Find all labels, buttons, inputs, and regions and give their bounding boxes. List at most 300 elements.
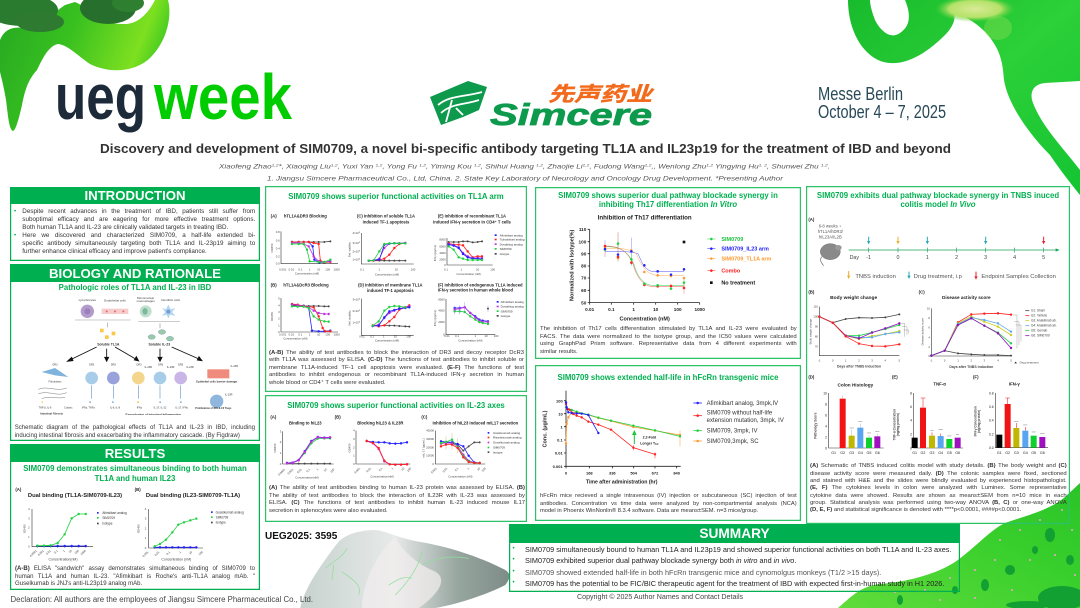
chart D: colon histology: ****: [850, 427, 854, 431]
chart A: hTL1A and DR3 blocking: 100: [325, 268, 330, 272]
chart A: dual binding TL1A-SIM0709-IL23: 2: [28, 525, 30, 529]
chart B: dual binding IL23-SIM0709-TL1A: 1: [145, 536, 147, 540]
panel: dual pathway blockade in vitro: [535, 187, 801, 359]
chart F: endogenous TL1A whole blood: 8000: [438, 298, 445, 302]
caption: Th17: [540, 326, 797, 354]
chart C: disease activity score: Days after TNBS induction: [950, 365, 994, 369]
arrow: 2.2-fold longer half-life: [632, 430, 659, 446]
chart A: hTL1A and DR3 blocking: (A): [271, 214, 277, 219]
chart C: disease activity score: 2: [929, 345, 931, 349]
chart E: recombinant TL1A IFN-gamma: 0.1: [444, 268, 448, 272]
chart B: dual binding IL23-SIM0709-TL1A: Isotype: [216, 520, 226, 524]
caption: IL-23 axes: The ability of test antibodies to block the interaction of IL23R with IL-23 was assessed by: [269, 493, 525, 499]
chart B: blocking hIL23 and IL23R: OD450: [347, 443, 351, 453]
chart B: blocking hIL23 and IL23R: 2: [353, 446, 355, 450]
panel: functional activities on TL1A arm: [265, 186, 527, 392]
chart A: dual binding TL1A-SIM0709-IL23: 1: [62, 548, 66, 552]
chart A: binding to hIL23: OD450: [273, 443, 277, 453]
charts: dual binding: [16, 487, 244, 562]
chart A: study timeline: Drug treatment, i.p: [914, 274, 962, 280]
chart F: IFN-gamma: (ng/mg protein): [977, 410, 981, 433]
chart: PK half-life: Time after administration (hr): [586, 479, 658, 485]
chart F: IFN-gamma: 0.8: [989, 392, 994, 396]
chart C: inhibition of mIL17 secretion: 20000: [426, 446, 434, 450]
chart F: IFN-gamma: [973, 375, 1048, 455]
chart A: binding to hIL23: 0: [280, 462, 282, 466]
chart A: dual binding TL1A-SIM0709-IL23: OD450: [23, 523, 27, 533]
chart B: body weight change: 90: [815, 325, 819, 329]
text: introduction bullets: specific antibody simultaneously targeting both TL1A and IL-23p19 aiming to: [22, 240, 255, 247]
chart A: hTL1A and DR3 blocking: 0.0: [276, 262, 280, 266]
chart F: IFN-gamma: 0.0: [989, 446, 994, 450]
chart F: endogenous TL1A whole blood: (F) Inhibition of endogenous TL1A induced: [438, 283, 523, 288]
declaration: Declaration: All authors are the employees of Jiangsu Simcere Pharmaceutical Co., Ltd.: [10, 594, 313, 604]
chart E: TNF-alpha: (E): [892, 375, 899, 380]
subtitle: pathologic roles: Pathologic roles of TL1A and IL-23 in IBD: [59, 283, 211, 292]
caption: TNBS model: (D, E, F) and statistical significance is denoted with ****p<0.0001, ####p<0.0001.: [810, 507, 1021, 513]
chart A: binding to hIL23: Concentration(nM): [295, 476, 319, 480]
chart A: study timeline: (A): [809, 217, 815, 222]
chart B: dual binding IL23-SIM0709-TL1A: 100: [198, 550, 204, 556]
chart A: study timeline: Day: [850, 255, 860, 261]
chart C: disease activity score: 10: [927, 306, 931, 310]
chart D: membrane TL1A apoptosis: Rel. viability: [347, 310, 351, 326]
chart C: disease activity score: 2: [971, 359, 973, 363]
diagram: TL1A and IL-23 pathway: IL-17, IFNγ: [176, 406, 189, 409]
diagram: TL1A and IL-23 pathway: Mononuclear: [137, 296, 154, 300]
chart E: TNF-alpha: G2: [921, 451, 926, 455]
panel: TNBS colitis model in vivo: [806, 186, 1070, 524]
authors: , Shihui Huang: [481, 164, 536, 170]
diagram: TL1A and IL-23 pathway: IL-23R: [167, 366, 175, 369]
chart A: dual binding TL1A-SIM0709-IL23: (A): [16, 487, 22, 492]
authors: 1, 2: [759, 162, 768, 168]
heading: in vivo synergy: colitis model In Vivo: [900, 200, 976, 209]
caption: TNBS model: group. Statistical analysis was performed using two-way ANOVA (B, C) or one-way ANOVA: [810, 500, 1067, 506]
chart C: inhibition of mIL17 secretion: Risankizumab analog: [493, 436, 522, 440]
chart A: study timeline: -1: [867, 255, 871, 261]
chart D: membrane TL1A apoptosis: 10: [394, 335, 397, 339]
chart C: soluble TL1A apoptosis: 0.1: [360, 268, 364, 272]
chart F: IFN-gamma: ****: [1015, 420, 1019, 424]
chart A: study timeline: [809, 217, 1060, 280]
chart E: TNF-alpha: (ng/mg protein): [896, 413, 900, 437]
chart F: IFN-gamma: IFN-γ: [1009, 382, 1021, 387]
chart A: study timeline: 0: [897, 255, 900, 261]
chart A: dual binding TL1A-SIM0709-IL23: 0.001: [37, 548, 45, 556]
caption: dual binding: (A-B) ELISA "sandwich" assay demonstrates simultaneous binding of SIM0709 to: [15, 566, 255, 572]
chart E: recombinant TL1A IFN-gamma: Duvakitug analog: [500, 243, 523, 247]
chart C: disease activity score: 0: [944, 359, 946, 363]
chart B: hTL1A and DcR3 blocking: 0.001: [279, 333, 287, 337]
chart B: hTL1A and DcR3 blocking: 10: [317, 333, 321, 337]
diagram: TL1A and IL-23 pathway: macrophages: [137, 299, 155, 303]
chart B: hTL1A and DcR3 blocking: [270, 283, 340, 341]
chart C: inhibition of mIL17 secretion: Inhibition of hIL23 induced mIL17 secretion: [432, 421, 519, 426]
chart C: inhibition of mIL17 secretion: 0.1: [454, 467, 460, 472]
chart A: hTL1A and DR3 blocking: 0.001: [279, 268, 287, 272]
chart E: recombinant TL1A IFN-gamma: (E) Inhibition of recombinant TL1A: [438, 214, 506, 219]
chart D: membrane TL1A apoptosis: [347, 283, 423, 343]
chart C: disease activity score: 1: [958, 359, 960, 363]
chart: PK half-life: [542, 390, 784, 485]
heading: in vitro synergy: SIM0709 shows superior dual pathway blockade synergy in: [558, 190, 778, 200]
text: introduction bullets: suboptimal efficacy and are eagering for more effective treatment options.: [22, 216, 255, 223]
chart F: endogenous TL1A whole blood: 2000: [438, 320, 445, 324]
chart B: hTL1A and DcR3 blocking: 1: [278, 324, 280, 328]
chart: inhibition of Th17 differentiation: 50: [581, 300, 587, 305]
chart B: dual binding IL23-SIM0709-TL1A: 0.1: [166, 550, 172, 555]
chart C: inhibition of mIL17 secretion: 40000: [426, 429, 434, 433]
chart C: inhibition of mIL17 secretion: Isotype: [493, 451, 503, 455]
chart B: body weight change: [809, 290, 909, 369]
chart E: recombinant TL1A IFN-gamma: 0: [444, 263, 446, 267]
authors: 1,2: [272, 162, 279, 168]
chart B: dual binding IL23-SIM0709-TL1A: 10: [188, 550, 194, 555]
chart C: soluble TL1A apoptosis: Concentration (nM): [375, 273, 399, 277]
chart E: recombinant TL1A IFN-gamma: 4000: [439, 251, 446, 255]
chart A: dual binding TL1A-SIM0709-IL23: 10: [68, 548, 73, 554]
caption: Th17: similar results.: [540, 348, 578, 354]
caption: Th17: The inhibition of Th17 cells differentiation stimulated by TL1A and IL-23 were evaluated by: [540, 326, 797, 332]
chart B: blocking hIL23 and IL23R: 100: [406, 467, 412, 473]
chart B: blocking hIL23 and IL23R: Concentration(nM): [370, 475, 394, 479]
chart D: colon histology: Pathology Score: [814, 413, 818, 439]
chart B: dual binding IL23-SIM0709-TL1A: SIM0709: [216, 515, 229, 519]
chart D: colon histology: G4: [858, 451, 863, 455]
chart A: hTL1A and DR3 blocking: hTL1A&DR3 Blocking: [284, 214, 327, 219]
authors: 1,2: [706, 162, 714, 168]
chart B: hTL1A and DcR3 blocking: 3: [278, 310, 280, 314]
authors: , Fudong Wang: [589, 164, 645, 170]
chart A: hTL1A and DR3 blocking: [270, 214, 340, 276]
diagram: TL1A and IL-23 pathway: Lymphocytes: [79, 298, 97, 302]
chart F: IFN-gamma: 0.4: [989, 419, 994, 423]
arrows: pathway effects: [67, 347, 202, 361]
chart A: binding to hIL23: 3: [280, 430, 282, 434]
text: summary bullets: •: [512, 557, 515, 563]
text: introduction bullets: Despite recent advances in the treatment of IBD, patients still suffer from: [22, 208, 255, 215]
diagram: TL1A and IL-23 pathway: IL-23R: [231, 365, 238, 368]
text: introduction bullets: •: [14, 233, 16, 239]
chart A: study timeline: 4: [1014, 255, 1017, 261]
caption: schematic: Schematic diagram of the pathological effects of TL1A and IL-23 in IBD, including: [15, 425, 255, 431]
chart B: blocking hIL23 and IL23R: 0.001: [353, 467, 361, 475]
chart D: colon histology: 6: [825, 414, 827, 418]
chart B: dual binding IL23-SIM0709-TL1A: Guselkumab analog: [216, 510, 244, 514]
caption: Th17: FACS. The data were normalized to the isotype group, and the IC50 values were calculated: [540, 334, 797, 340]
chart F: IFN-gamma: ****: [1024, 424, 1028, 428]
caption: TNBS model: disease activity score were measured daily. (D) The colonic samples were fixed, sectioned: [810, 471, 1067, 477]
chart C: inhibition of mIL17 secretion: 10000: [426, 454, 434, 458]
text: introduction bullets: further enhance clinical efficacy and improve patient's compliance.: [22, 248, 207, 255]
chart B: blocking hIL23 and IL23R: [335, 415, 412, 479]
decoration: green organic shape top right: [848, 0, 1080, 195]
chart C: soluble TL1A apoptosis: [347, 214, 416, 277]
chart F: IFN-gamma: IFN-γ Concentration: [974, 407, 978, 437]
chart A: dual binding TL1A-SIM0709-IL23: 4: [28, 507, 30, 511]
caption: half-life: model in Phoenix WinNonlin® 8.3.4 software. Data are means±SEM. n=3 mice/group.: [540, 508, 758, 514]
authors: , Shunwei Zhu: [767, 164, 821, 170]
chart F: endogenous TL1A whole blood: 0: [443, 333, 445, 337]
chart F: IFN-gamma: G1: [997, 451, 1002, 455]
legend: Th17 chart: Combo: [722, 268, 741, 274]
chart C: soluble TL1A apoptosis: 4×10⁵: [352, 231, 360, 235]
chart F: IFN-gamma: G6: [1040, 451, 1045, 455]
chart C: soluble TL1A apoptosis: 1×10⁵: [352, 258, 360, 262]
chart C: soluble TL1A apoptosis: 100: [411, 268, 416, 272]
chart B: body weight change: 2: [859, 359, 861, 363]
chart F: endogenous TL1A whole blood: Concentration (nM): [458, 339, 482, 343]
chart D: colon histology: Colon Histology: [838, 383, 874, 388]
panel: functional activities on IL-23 axes: [265, 395, 527, 522]
heading: biology and rationale: BIOLOGY AND RATIONALE: [49, 266, 221, 281]
caption: TNBS model: (E, F) The cytokines levels in colon were analyzed with Luminex. Some representative: [810, 485, 1067, 491]
heading: biology and rationale: [10, 264, 260, 282]
chart: PK half-life: Conc. (μg/mL): [542, 410, 548, 447]
chart A: study timeline: 1: [926, 255, 929, 261]
chart C: disease activity score: Disease activity score: [942, 295, 991, 300]
chart B: dual binding IL23-SIM0709-TL1A: (B): [135, 487, 142, 492]
arrow: 2.2-fold longer half-life: Longer T: [640, 441, 655, 445]
chart B: hTL1A and DcR3 blocking: 4: [278, 304, 280, 308]
chart B: body weight change: 4: [885, 359, 887, 363]
chart E: TNF-alpha: 2: [910, 433, 912, 437]
chart C: disease activity score: G6: SIM0709: [1031, 334, 1050, 338]
chart C: disease activity score: Drug treatment: [1020, 360, 1039, 364]
diagram: TL1A and IL-23 pathway: Epithelial cells barrier damage: [196, 379, 238, 383]
authors: *, Xiaoqing Liu: [279, 164, 331, 170]
chart B: blocking hIL23 and IL23R: 4: [353, 429, 355, 433]
caption: TL1A arm: with TL1A was assessed by ELISA. (C-D) The functions of test antibodies to inhibit soluble or: [269, 357, 524, 363]
chart D: colon histology: G1: [832, 451, 836, 455]
chart B: body weight change: Days after TNBS induction: [837, 365, 881, 369]
chart D: colon histology: 4: [825, 425, 827, 429]
chart E: TNF-alpha: 8: [910, 392, 912, 396]
chart: inhibition of Th17 differentiation: 80: [581, 263, 587, 268]
chart A: dual binding TL1A-SIM0709-IL23: Concentration(nM): [49, 557, 78, 561]
chart C: disease activity score: 6: [929, 326, 931, 330]
chart B: blocking hIL23 and IL23R: 0: [353, 462, 355, 466]
chart D: colon histology: ****: [876, 430, 880, 434]
text: summary bullets: [512, 545, 951, 588]
heading: in vivo synergy: [817, 190, 1059, 209]
chart B: body weight change: 80: [815, 335, 819, 339]
heading: half-life: SIM0709 shows extended half-life in hFcRn transgenic mice: [558, 373, 778, 382]
chart C: disease activity score: G2: Vehicle: [1031, 314, 1048, 318]
chart A: binding to hIL23: 0.0001: [277, 468, 286, 477]
chart: inhibition of Th17 differentiation: 60: [581, 288, 587, 293]
chart: PK half-life: 672: [652, 470, 659, 475]
chart C: inhibition of mIL17 secretion: 0.01: [442, 467, 449, 474]
diagram: TL1A and IL-23 pathway: Dendritic cells: [161, 298, 180, 302]
chart: inhibition of Th17 differentiation: 1000: [695, 307, 706, 312]
chart E: TNF-alpha: ***: [956, 433, 960, 437]
chart E: TNF-alpha: [892, 375, 963, 455]
caption: TNBS model: [810, 463, 1067, 513]
legend: half-life chart: extension mutation, 3mpk, IV: [707, 418, 784, 424]
authors: ,, Wenlong Zhu: [651, 164, 707, 170]
diagram: TL1A and IL-23 pathway: IFNγ: [137, 406, 143, 409]
diagram: TL1A and IL-23 pathway: IFNγ, TNFα: [82, 406, 95, 409]
chart C: disease activity score: 4: [929, 335, 931, 339]
text: introduction bullets: [14, 208, 255, 255]
chart: inhibition of Th17 differentiation: 100: [674, 307, 682, 312]
authors: 1,2: [376, 162, 383, 168]
chart C: disease activity score: Disease activity score: [921, 318, 925, 345]
chart A: dual binding TL1A-SIM0709-IL23: 3: [28, 516, 30, 520]
chart B: blocking hIL23 and IL23R: 10: [400, 467, 406, 472]
authors: 1,2: [583, 162, 590, 168]
diagram: TL1A and IL-23 pathway: Soluble TL1A: [97, 342, 120, 346]
chart B: dual binding IL23-SIM0709-TL1A: 3: [145, 516, 147, 520]
diagram: TL1A and IL-23 pathway: IL-23R: [225, 393, 233, 396]
chart: inhibition of Th17 differentiation: Concentration (nM): [620, 316, 670, 322]
chart A: hTL1A and DR3 blocking: OD450: [270, 243, 274, 253]
chart A: hTL1A and DR3 blocking: 10: [317, 268, 321, 272]
chart A: binding to hIL23: [270, 415, 336, 480]
chart C: soluble TL1A apoptosis: 3×10⁵: [352, 241, 360, 245]
logo: Simcere: Simcere: [490, 97, 652, 132]
chart: inhibition of Th17 differentiation: 1: [633, 307, 636, 312]
chart D: membrane TL1A apoptosis: 0.01: [359, 335, 365, 339]
chart A: dual binding TL1A-SIM0709-IL23: Dual binding (TL1A-SIM0709-IL23): [28, 493, 122, 499]
caption: IL-23 axes: secretion in splenocytes were also evaluated.: [269, 508, 388, 514]
chart A: dual binding TL1A-SIM0709-IL23: 1000: [80, 548, 87, 556]
chart F: endogenous TL1A whole blood: Isotype: [501, 314, 511, 318]
charts: histology and cytokines: [808, 375, 1048, 455]
chart: inhibition of Th17 differentiation: 110: [579, 227, 587, 232]
chart A: hTL1A and DR3 blocking: Concentration (nM): [295, 272, 319, 276]
illustration: liver: [300, 530, 509, 608]
authors: 1,2: [419, 162, 427, 168]
chart B: body weight change: 110: [814, 305, 819, 309]
chart: PK half-life: 0.001: [553, 464, 563, 469]
chart E: TNF-alpha: G1: [913, 451, 917, 455]
caption: schematic: inducing intestinal fibrosis and exacerbating the inflammatory cascade. (By Figdraw): [15, 433, 240, 439]
chart: PK half-life: 0.1: [557, 437, 563, 442]
diagram: TL1A and IL-23 pathway: [38, 296, 238, 415]
chart: inhibition of Th17 differentiation: [570, 214, 772, 322]
legend: Th17 chart: [708, 237, 772, 286]
authors: [219, 162, 830, 170]
chart C: soluble TL1A apoptosis: 1: [379, 268, 381, 272]
panel: introduction: [10, 187, 260, 261]
copyright: Copyright © 2025 Author Names and Contact Details: [577, 593, 743, 601]
chart B: dual binding IL23-SIM0709-TL1A: Dual binding (IL23-SIM0709-TL1A): [146, 493, 240, 499]
caption: dual binding: Guselkumab is JNJ's anti-IL23p19 analog mAb.: [15, 581, 142, 587]
chart E: recombinant TL1A IFN-gamma: [433, 214, 525, 276]
chart D: membrane TL1A apoptosis: 0.1: [370, 335, 374, 339]
chart B: body weight change: (B): [809, 290, 815, 295]
logo: UEG Week: [55, 68, 292, 133]
chart E: TNF-alpha: ***: [931, 429, 934, 433]
chart B: hTL1A and DcR3 blocking: 0.1: [298, 333, 303, 337]
chart E: TNF-alpha: G4: [939, 451, 943, 455]
chart: inhibition of Th17 differentiation: 100: [579, 239, 587, 244]
chart D: colon histology: (D): [809, 375, 815, 380]
chart A: dual binding TL1A-SIM0709-IL23: 0.01: [45, 548, 52, 555]
chart: inhibition of Th17 differentiation: Normalized with Isotype(%): [570, 229, 576, 301]
chart E: TNF-alpha: ****: [948, 435, 952, 439]
caption: Th17: using GraphPad Prism software. Representative data from 4 different experiments with: [540, 341, 797, 347]
authors: , Yong Fu: [382, 164, 419, 170]
chart: PK half-life: 0.01: [555, 450, 563, 455]
chart D: membrane TL1A apoptosis: Concentration (nM): [375, 339, 399, 343]
chart E: TNF-alpha: ****: [939, 428, 943, 432]
chart C: disease activity score: 4: [998, 359, 1000, 363]
authors: 1,2: [821, 162, 829, 168]
chart A: study timeline: hIL23A/IL2B: [819, 234, 842, 239]
text: introduction bullets: Both human TL1A and IL-23 are clinically validated targets in treating IBD.: [22, 224, 228, 231]
chart F: IFN-gamma: (F): [973, 375, 979, 380]
chart C: soluble TL1A apoptosis: 10: [395, 268, 398, 272]
chart D: colon histology: G5: [867, 451, 872, 455]
chart D: membrane TL1A apoptosis: 1×10⁵: [352, 321, 360, 325]
error bars: [605, 232, 684, 293]
chart B: dual binding IL23-SIM0709-TL1A: 0.01: [154, 550, 161, 557]
caption: dual binding: [15, 566, 255, 587]
diagram: TL1A and IL-23 pathway: DR3: [53, 363, 58, 366]
caption: IL-23 axes: ELISA. (C) The functions of test antibodies to inhibit human IL-23 induced mouse IL17: [269, 500, 525, 506]
chart F: endogenous TL1A whole blood: SIM0709: [501, 310, 513, 314]
legend: half-life chart: SIM0709, 3mpk, IV: [707, 428, 758, 434]
chart E: TNF-alpha: G3: [930, 451, 935, 455]
subtitle: simultaneous binding: TL1A and human IL23: [95, 474, 175, 483]
heading: introduction: [10, 187, 260, 204]
chart A: dual binding TL1A-SIM0709-IL23: Isotype: [103, 521, 113, 525]
chart F: endogenous TL1A whole blood: IFN-γ secretion in human whole blood: [438, 288, 514, 293]
authors: , Zhaojie Li: [543, 164, 583, 170]
chart: inhibition of Th17 differentiation: 10: [653, 307, 659, 312]
chart C: disease activity score: 3: [984, 359, 986, 363]
chart C: soluble TL1A apoptosis: induced TF-1 apoptosis: [363, 220, 410, 225]
chart A: hTL1A and DR3 blocking: 1000: [334, 268, 340, 272]
chart E: recombinant TL1A IFN-gamma: 8000: [439, 238, 446, 242]
heading: in vitro synergy: inhibiting Th17 differentiation In Vitro: [599, 200, 737, 209]
chart D: membrane TL1A apoptosis: 1: [383, 335, 385, 339]
icon: mouse: [821, 244, 842, 266]
chart: PK half-life: 10: [558, 411, 563, 416]
chart E: recombinant TL1A IFN-gamma: 10: [476, 268, 480, 272]
chart F: endogenous TL1A whole blood: 0.01: [444, 334, 450, 338]
heading: in vivo synergy: SIM0709 exhibits dual pathway blockade synergy in TNBS inuced: [817, 190, 1059, 200]
diagram: TL1A and IL-23 pathway: DR3: [111, 363, 116, 366]
chart A: dual binding TL1A-SIM0709-IL23: 1: [28, 535, 30, 539]
text: summary bullets: SIM0709 simultaneously bound to human TL1A and IL23p19 and showed superior functional activities on both TL1A and IL-23 axes.: [525, 545, 951, 554]
chart C: inhibition of mIL17 secretion: 30000: [426, 437, 434, 441]
legend: Th17 chart: SIM0709_IL23 arm: [722, 246, 769, 252]
heading: IL-23 axes: SIM0709 shows superior functional activities on IL-23 axes: [287, 400, 505, 410]
chart C: inhibition of mIL17 secretion: 1: [466, 467, 470, 471]
chart B: hTL1A and DcR3 blocking: 0: [278, 330, 280, 334]
chart C: disease activity score: (C): [919, 290, 926, 295]
caption: TL1A arm: [269, 350, 524, 386]
panel: extended half-life: [535, 365, 801, 521]
chart D: colon histology: G6: [875, 451, 880, 455]
chart A: hTL1A and DR3 blocking: 0.6: [276, 239, 280, 243]
subtitle: simultaneous binding: SIM0709 demonstrates simultaneous binding to both human: [23, 464, 247, 473]
chart: inhibition of Th17 differentiation: 90: [581, 251, 587, 256]
chart: inhibition of Th17 differentiation: Inhibition of Th17 differentiation: [598, 214, 692, 221]
affiliations: 1. Jiangsu Simcere Pharmaceutical Co., Ltd, China. 2. State Key Laboratory of Neurology and Oncology Drug Development. *Presenting Author: [267, 176, 784, 182]
chart C: inhibition of mIL17 secretion: 0.001: [430, 467, 438, 475]
chart C: inhibition of mIL17 secretion: [421, 415, 522, 479]
chart B: blocking hIL23 and IL23R: 3: [353, 437, 355, 441]
logo: Simcere: [430, 78, 655, 132]
decoration: green organic shape top left: [0, 0, 170, 131]
authors: 1,2: [536, 162, 544, 168]
